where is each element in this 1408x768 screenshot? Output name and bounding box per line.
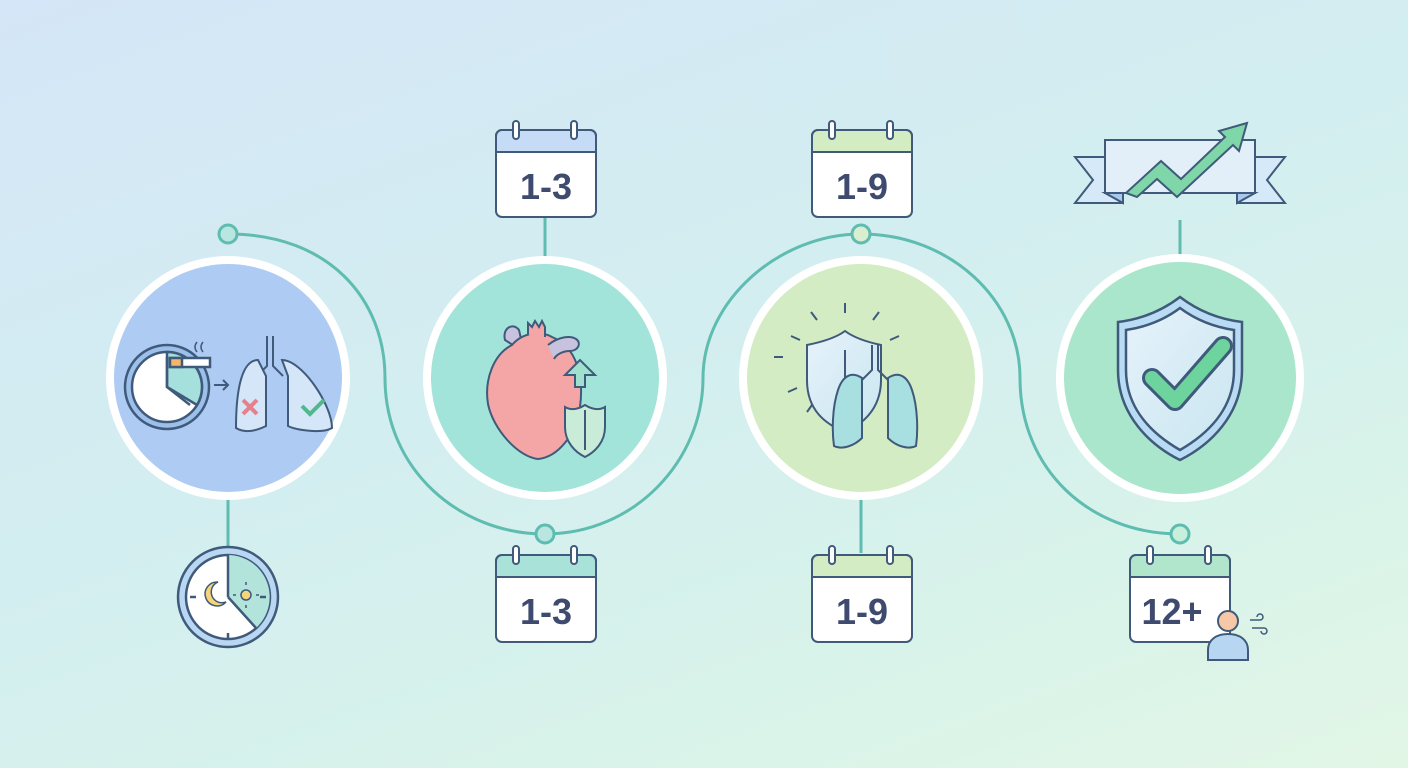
circle 2: heart (423, 256, 667, 500)
calendar: bottom 1-9 (812, 546, 912, 642)
timeline path (228, 217, 1180, 553)
banner with rising arrow (1075, 123, 1285, 203)
calendar: top 1-3 (496, 121, 596, 217)
circle 4: shield check (1056, 254, 1304, 502)
circle 3: lungs shield (739, 256, 983, 500)
calendar: 12+ with person (1130, 546, 1267, 660)
circle 1: time after quitting (106, 256, 350, 500)
icon: lungs with x and check (236, 336, 332, 431)
calendar: bottom 1-9: 1-9 (836, 591, 888, 632)
timeline dots (219, 225, 1189, 543)
icon: clock with cigarette (125, 342, 228, 429)
icon: heart with arrow and shield (487, 321, 605, 459)
calendar: top 1-3: 1-3 (520, 166, 572, 207)
icon: shield and lungs (774, 303, 917, 448)
calendar: bottom 1-3: 1-3 (520, 591, 572, 632)
icon: shield with check (1118, 297, 1242, 460)
small clock: day and night (178, 547, 278, 647)
calendar: bottom 1-3 (496, 546, 596, 642)
calendar: top 1-9 (812, 121, 912, 217)
calendar: 12+ with person: 12+ (1141, 591, 1203, 632)
calendar: top 1-9: 1-9 (836, 166, 888, 207)
